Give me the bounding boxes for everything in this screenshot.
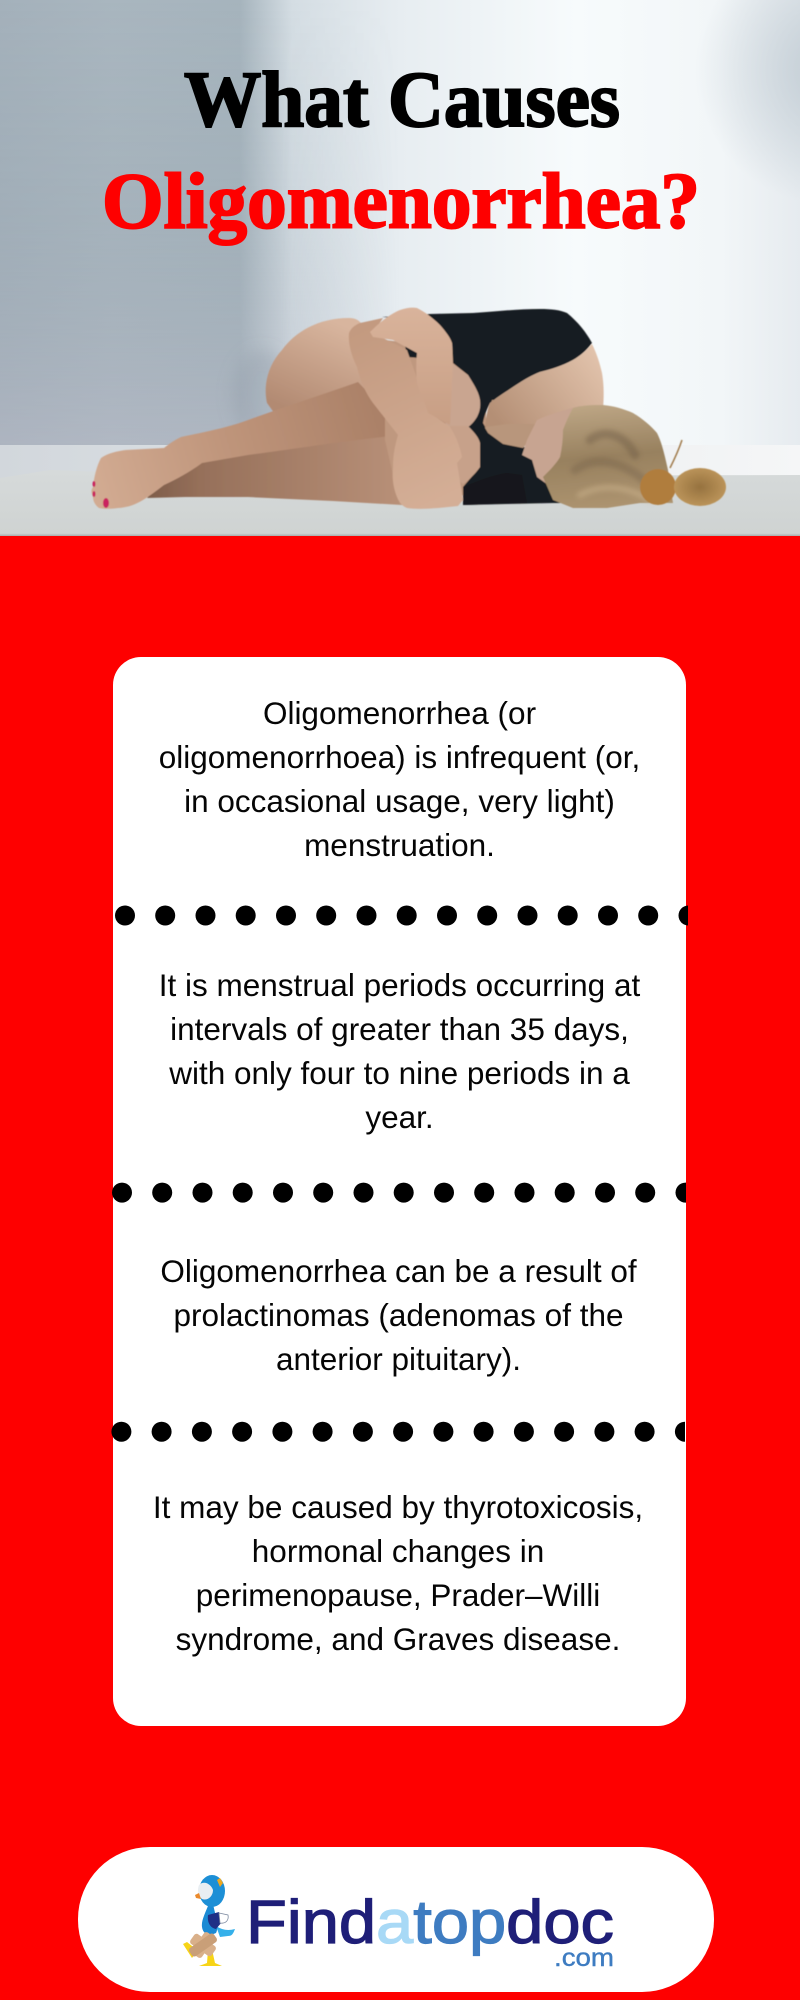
chest skin [485, 400, 545, 448]
text: frequency of periods [159, 967, 640, 1135]
hair tie band [640, 469, 676, 505]
text: prolactinomas: anterior pituitary). [276, 1341, 521, 1377]
title: What Causes: What Causes [184, 57, 620, 144]
wall background [0, 0, 800, 445]
icon: bird mascot [183, 1875, 235, 1966]
divider: dotted row 3 [111, 1422, 685, 1442]
text: frequency of periods: It is menstrual periods occurring at [159, 967, 640, 1003]
text: definition: menstruation. [304, 827, 495, 863]
toenails [92, 481, 109, 508]
text: definition: Oligomenorrhea (or [263, 695, 536, 731]
text: prolactinomas: prolactinomas (adenomas of the [174, 1297, 624, 1333]
wordmark: .com: .com [554, 1944, 614, 1972]
upper hand and arm [370, 308, 453, 425]
bare back and shoulder [485, 344, 604, 427]
lower leg [147, 420, 402, 505]
logo: Findatopdoc mascot and wordmark [183, 1875, 614, 1972]
panel: hero photo with title [0, 0, 800, 536]
front leg and foot [92, 382, 398, 509]
text: frequency of periods: with only four to nine periods in a [169, 1055, 630, 1091]
hair bun [674, 468, 726, 506]
baseboard [0, 445, 800, 485]
text: frequency of periods: year. [365, 1099, 434, 1135]
text: prolactinomas [160, 1253, 637, 1377]
text: prolactinomas: Oligomenorrhea can be a result of [160, 1253, 637, 1289]
text: frequency of periods: intervals of greater than 35 days, [170, 1011, 629, 1047]
hair [543, 405, 673, 508]
stray hair wisp [670, 440, 682, 468]
face [522, 406, 580, 490]
title: Oligomenorrhea?: Oligomenorrhea? [102, 158, 700, 246]
crossed arm and lower hand [349, 318, 463, 509]
text: other causes: perimenopause, Prader–Willi [196, 1577, 600, 1613]
text: definition: in occasional usage, very light) [184, 783, 615, 819]
floor mat [0, 470, 800, 536]
hair strands [575, 434, 655, 500]
text: definition [159, 695, 640, 863]
text: other causes: syndrome, and Graves disease. [176, 1621, 620, 1657]
divider: dotted row 1 [115, 906, 688, 926]
small dark patch between arms [405, 345, 420, 358]
text: other causes: hormonal changes in [252, 1533, 544, 1569]
panel: logo pill [78, 1847, 714, 1992]
breast lower [445, 426, 480, 484]
back thigh [266, 318, 420, 425]
text: definition: oligomenorrhoea) is infrequent (or, [159, 739, 640, 775]
wordmark: Findatopdoc: Findatopdoc [246, 1888, 614, 1956]
woman curled up on the floor [92, 308, 726, 509]
breast upper [445, 363, 480, 430]
skin behind arms [385, 340, 486, 505]
sleeve at wrist [463, 473, 527, 505]
text: other causes: It may be caused by thyrotoxicosis, [153, 1489, 643, 1525]
text: other causes [153, 1489, 643, 1657]
divider: dotted row 2 [112, 1182, 686, 1203]
panel: white text card [113, 657, 686, 1726]
torso clothing [382, 309, 592, 505]
